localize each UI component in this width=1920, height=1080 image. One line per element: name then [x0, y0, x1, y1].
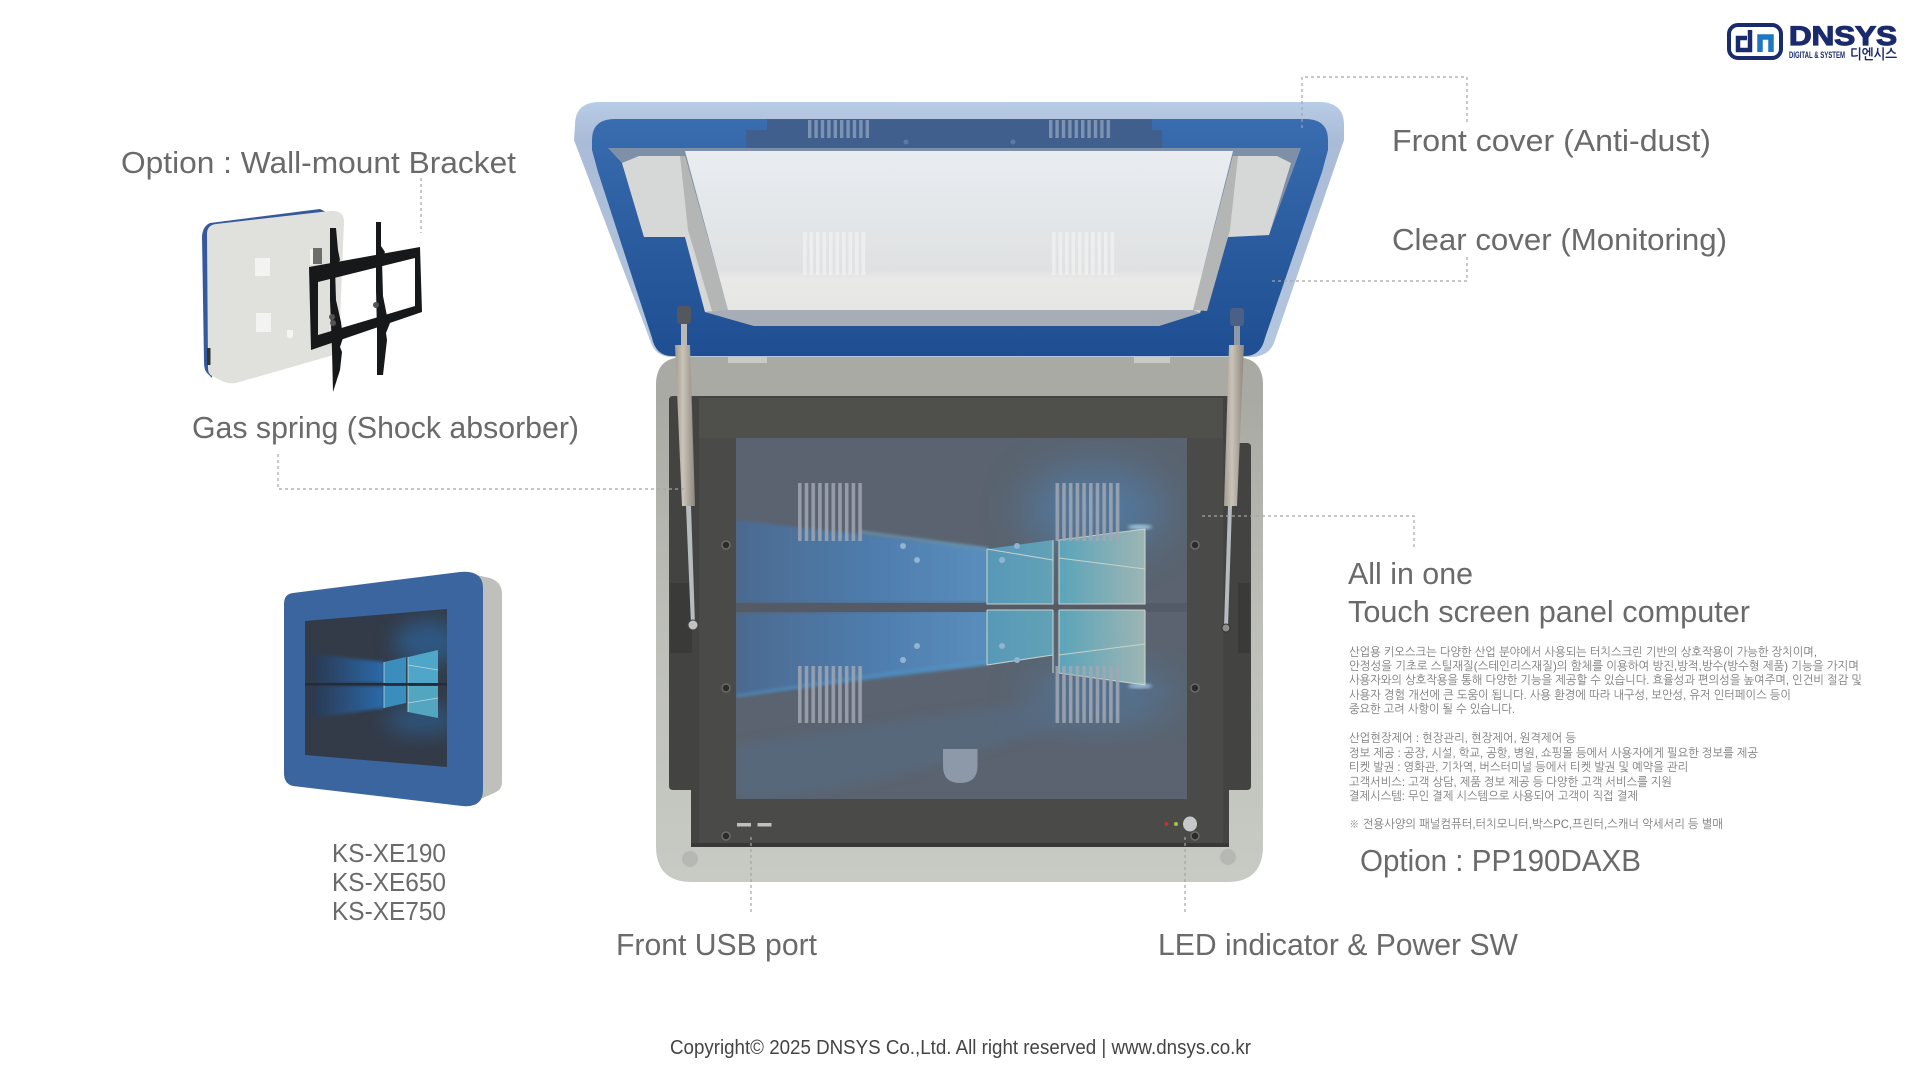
piston rod: [1224, 506, 1232, 627]
usage list: 산업현장제어 : 현장관리, 현장제어, 원격제어 등: [1349, 731, 1576, 745]
front cover leader line: [1302, 77, 1467, 128]
heading line one: All in one: [1348, 556, 1473, 591]
recess vents: [808, 120, 1111, 138]
right side light panel: [1193, 156, 1291, 313]
description paragraph: 안정성을 기초로 스틸재질(스테인리스재질)의 함체를 이용하여 방진,방적,방수(방수형 제품) 기능을 가지며: [1349, 659, 1859, 673]
hinge tabs: [728, 357, 1170, 363]
description paragraph: 사용자 경험 개선에 큰 도움이 됩니다. 사용 환경에 따라 내구성, 보안성, 유저 인터페이스 등이: [1349, 688, 1791, 702]
left side light panel: [622, 156, 728, 312]
logo mark: [1729, 25, 1781, 58]
description paragraph: 사용자와의 상호작용을 통해 다양한 기능을 제공할 수 있습니다. 효율성과 편의성을 높여주며, 인건비 절감 및: [1349, 673, 1862, 687]
left side dark strip: [680, 156, 728, 311]
gas spring leader line: [278, 454, 685, 489]
gas spring left: [675, 306, 698, 630]
heading: all in one: [1348, 556, 1750, 629]
main product: kiosk body: [656, 357, 1263, 882]
top centre recess: [746, 119, 1162, 150]
piston rod: [686, 506, 695, 625]
logo korean name: 디엔시스: [1850, 46, 1897, 62]
upper hinge: [1230, 308, 1244, 326]
vent slots: [798, 483, 1122, 723]
wallpaper: [305, 620, 462, 734]
side housing: [462, 572, 502, 806]
right side dark strip: [1193, 156, 1238, 311]
blue front frame: [284, 572, 483, 806]
logo: DNSYS: [1729, 21, 1897, 62]
mounting dots: [900, 543, 1020, 663]
translucent anti-dust cover: [574, 102, 1344, 357]
label: front cover: Front cover (Anti-dust): [1392, 123, 1711, 158]
USB leader line: [750, 837, 752, 912]
lower window band: [705, 310, 1200, 326]
usage list: 고객서비스: 고객 상담, 제품 정보 제공 등 다양한 고객 서비스를 지원: [1349, 775, 1672, 789]
glints at logo corners: [1128, 524, 1152, 530]
label: LED indicator and power switch: LED indicator & Power SW: [1158, 927, 1519, 962]
usage list: 티켓 발권 : 영화관, 기차역, 버스터미널 등에서 티켓 발권 및 예약을 관리: [1349, 760, 1688, 774]
upper hinge: [677, 306, 691, 324]
vents and ports: [255, 258, 270, 276]
corner screws: [682, 851, 698, 867]
lower mount: [1222, 624, 1230, 632]
side latch plates: [670, 583, 1250, 653]
spring cylinder: [675, 345, 695, 506]
spring cylinder: [1224, 345, 1244, 506]
back housing: [207, 211, 344, 383]
usage list: 결제시스템: 무인 결제 시스템으로 사용되어 고객이 직접 결제: [1349, 789, 1638, 803]
recess dots: [904, 140, 1016, 144]
copyright footer: Copyright© 2025 DNSYS Co.,Ltd. All right reserved | www.dnsys.co.kr: [670, 1037, 1251, 1059]
model KS-XE650: KS-XE650: [332, 867, 446, 897]
LED indicators and power switch: [1164, 816, 1197, 832]
panel screen: [736, 438, 1187, 799]
description paragraph: 산업용 키오스크는 다양한 산업 분야에서 사용되는 터치스크린 기반의 상호작용이 가능한 장치이며,: [1349, 645, 1817, 659]
LED leader line: [1184, 837, 1186, 912]
usage list: 정보 제공 : 공장, 시설, 학교, 공항, 병원, 쇼핑몰 등에서 사용자에게 필요한 정보를 제공: [1349, 746, 1758, 760]
bracket knobs: [329, 314, 335, 320]
logo tagline: DIGITAL & SYSTEM: [1789, 50, 1845, 60]
model KS-XE750: KS-XE750: [332, 896, 446, 926]
window logo panes: [987, 540, 1053, 604]
front USB ports: [737, 823, 772, 826]
model names: [332, 838, 446, 926]
label: option model: Option : PP190DAXB: [1360, 843, 1641, 878]
small front view of product: [284, 572, 502, 806]
all in one leader line: [1202, 516, 1414, 549]
blue front edge: [202, 209, 326, 378]
label: front USB port: Front USB port: [616, 927, 817, 962]
accessory note: ※ 전용사양의 패널컴퓨터,터치모니터,박스PC,프린터,스캐너 악세서리 등 별매: [1349, 817, 1723, 831]
clear cover leader line: [1269, 257, 1467, 281]
label: wall-mount bracket: Option : Wall-mount Bracket: [121, 145, 516, 180]
light grey housing: [656, 357, 1263, 882]
label: clear cover: Clear cover (Monitoring): [1392, 222, 1727, 257]
grey glazing frame: [608, 148, 1301, 326]
dark recess with side wings: [669, 396, 1251, 847]
faint vents seen through window: [803, 232, 1116, 275]
usage list: [1349, 731, 1758, 803]
model KS-XE190: KS-XE190: [332, 838, 446, 868]
heading line two: Touch screen panel computer: [1348, 594, 1750, 629]
logo wordmark: DNSYS: [1789, 21, 1897, 51]
wallpaper light rays: [736, 468, 1187, 799]
description paragraph: [1349, 645, 1862, 716]
front cover lid: [574, 102, 1344, 363]
product back with wall-mount bracket: [202, 209, 422, 392]
frame screws: [722, 541, 1199, 840]
description paragraph: 중요한 고려 사항이 될 수 있습니다.: [1349, 702, 1515, 716]
dark screen: [305, 609, 447, 767]
shield cutout: [943, 749, 978, 783]
gas spring right: [1222, 308, 1244, 632]
wall-mount bracket leader line: [420, 178, 422, 233]
label: gas spring: Gas spring (Shock absorber): [192, 410, 579, 445]
blue lid frame: [592, 119, 1328, 356]
clear window: [685, 151, 1233, 310]
lower mount: [688, 620, 698, 630]
black bracket: [309, 222, 422, 392]
